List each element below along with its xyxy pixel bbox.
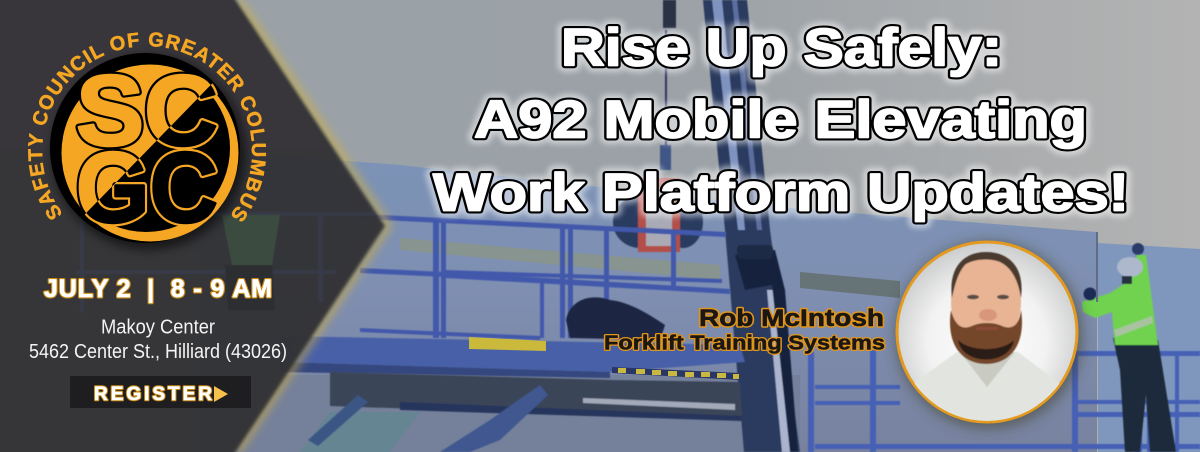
gold glowing edge [235,0,387,452]
event date and time: JULY 2 | 8 - 9 AM [44,275,272,303]
worker in high-visibility jacket [1082,243,1176,452]
title [433,18,1129,222]
dim scene behind panel [76,212,376,312]
beard [950,310,1022,364]
title: Rise Up Safely: [561,18,1002,78]
yellow warning label [469,337,546,351]
shirt [914,351,1060,421]
title: A92 Mobile Elevating [474,90,1087,150]
presenter name: Rob McIntosh [699,305,884,332]
title: A92 Mobile Elevating [474,90,1087,150]
logo letters SC GC: SC [76,55,218,167]
gray wall seam [1096,232,1098,302]
logo letters SC GC [75,72,219,226]
dark bag on platform [566,297,665,340]
logo disc [50,53,240,243]
logo ring text: SAFETY COUNCIL OF GREATER COLUMBUS [28,32,266,222]
eyes [967,295,979,299]
icon: play arrow [214,386,228,402]
nose [979,309,997,321]
register button [70,376,251,408]
logo letters SC GC: GC [76,132,218,244]
presenter company: Forklift Training Systems [604,332,885,354]
logo letters SC GC: GC [76,132,218,244]
collar shadow [960,352,1015,387]
logo letters SC GC: GC [76,132,218,244]
title: A92 Mobile Elevating [474,90,1087,150]
right railing [808,350,1200,452]
crane boom [703,0,800,452]
venue address: 5462 Center St., Hilliard (43026) [29,341,287,363]
hazard step [612,367,740,380]
lifting cable and vacuum device [613,0,703,252]
logo letters SC GC: SC [76,55,218,167]
platform underside [308,372,742,452]
logo letters SC GC: SC [76,55,218,167]
presenter company: Forklift Training Systems [604,332,885,354]
title: Rise Up Safely: [561,18,1002,78]
presenter portrait [896,242,1082,430]
logo letters SC GC: SC [76,55,218,167]
logo: Safety Council of Greater Columbus [28,32,266,253]
title: Work Platform Updates! [433,164,1129,222]
head [950,258,1022,328]
title: Work Platform Updates! [433,164,1129,222]
title: Work Platform Updates! [433,164,1129,222]
register button: REGISTER [94,384,212,405]
title: Rise Up Safely: [561,18,1002,78]
dark chevron panel [0,0,387,452]
register button: REGISTER [94,384,212,405]
presenter name: Rob McIntosh [699,305,884,332]
venue name: Makoy Center [101,316,215,338]
logo letters SC GC: GC [76,132,218,244]
platform railing [280,214,745,378]
mouth [976,327,998,330]
hair [951,252,1022,298]
event date and time: JULY 2 | 8 - 9 AM [44,275,272,303]
